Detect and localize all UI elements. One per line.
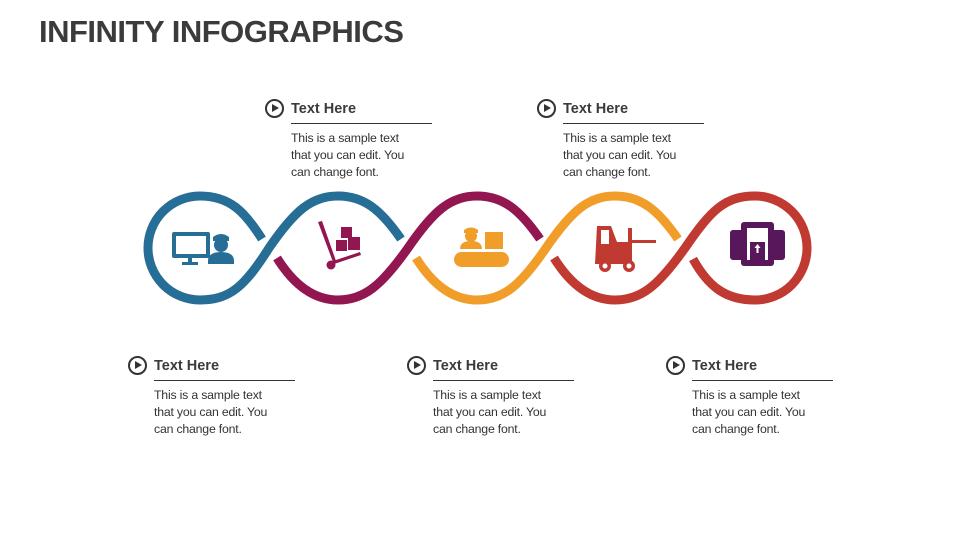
text block: bottom 1 bbox=[128, 356, 295, 436]
chain segment: red bbox=[554, 196, 807, 300]
text block: bottom 1: can change font. bbox=[154, 422, 242, 436]
icon: hand truck with boxes bbox=[318, 221, 361, 270]
chain segment: blue bbox=[148, 196, 401, 300]
text block: top 2: can change font. bbox=[563, 165, 651, 179]
text block: bottom 1: that you can edit. You bbox=[154, 405, 267, 419]
icon: computer and operator bbox=[172, 232, 234, 265]
text block: top 1: Text Here bbox=[291, 101, 356, 117]
text block: bottom 3: that you can edit. You bbox=[692, 405, 805, 419]
icon: worker with box on conveyor bbox=[454, 228, 509, 267]
icon: scanner box bbox=[730, 222, 785, 266]
text block: bottom 3 bbox=[666, 356, 833, 436]
chain segment: orange bbox=[416, 196, 678, 300]
text block: bottom 2: Text Here bbox=[433, 358, 498, 374]
chain segment: purple bbox=[277, 196, 540, 300]
text block: top 2: This is a sample text bbox=[563, 131, 671, 145]
text block: top 1: This is a sample text bbox=[291, 131, 399, 145]
text block: bottom 1: This is a sample text bbox=[154, 388, 262, 402]
text block: bottom 3: This is a sample text bbox=[692, 388, 800, 402]
text block: top 1 bbox=[265, 99, 432, 179]
text block: bottom 2 bbox=[407, 356, 574, 436]
text block: bottom 3: Text Here bbox=[692, 358, 757, 374]
icon: forklift bbox=[595, 226, 656, 272]
text block: bottom 2: can change font. bbox=[433, 422, 521, 436]
text block: bottom 1: Text Here bbox=[154, 358, 219, 374]
text block: bottom 3: can change font. bbox=[692, 422, 780, 436]
text block: bottom 2: This is a sample text bbox=[433, 388, 541, 402]
title: INFINITY INFOGRAPHICS bbox=[39, 14, 403, 49]
text block: top 2: Text Here bbox=[563, 101, 628, 117]
text block: top 2: that you can edit. You bbox=[563, 148, 676, 162]
text block: top 2 bbox=[537, 99, 704, 179]
text block: top 1: can change font. bbox=[291, 165, 379, 179]
text block: top 1: that you can edit. You bbox=[291, 148, 404, 162]
text block: bottom 2: that you can edit. You bbox=[433, 405, 546, 419]
